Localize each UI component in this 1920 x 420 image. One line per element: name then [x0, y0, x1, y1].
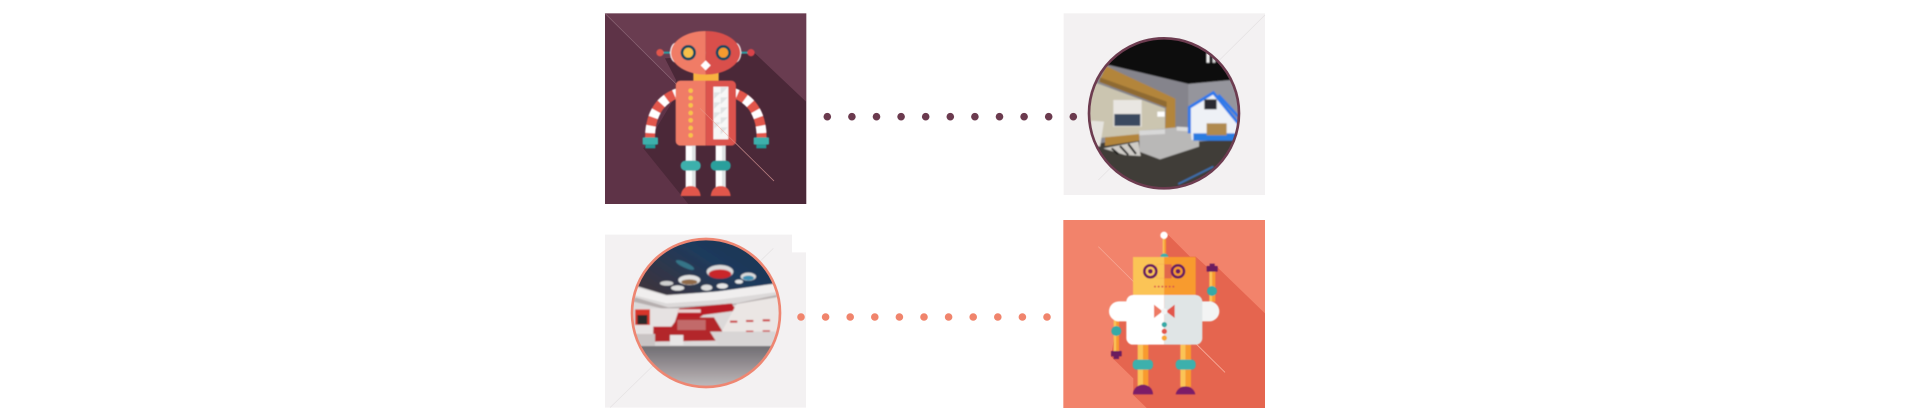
red wall graphics	[636, 308, 680, 334]
photo: lounge booth	[1090, 40, 1238, 187]
antenna	[1163, 238, 1164, 255]
robot: orange and white	[1109, 232, 1219, 394]
wood beam	[1099, 66, 1175, 132]
panel: coral robot tile	[1063, 220, 1265, 408]
photo: red exhibition hall	[633, 240, 778, 386]
left wall	[1090, 82, 1166, 138]
ceiling	[1108, 40, 1230, 85]
panel: exhibition hall photo, red hall	[605, 230, 806, 408]
shoulders	[1109, 301, 1139, 321]
floor	[641, 345, 771, 386]
neck	[693, 73, 719, 81]
panel: purple robot tile	[605, 13, 806, 204]
left lowered arm	[1114, 320, 1116, 352]
starry ceiling	[638, 240, 773, 296]
chest buttons	[688, 88, 693, 138]
legs	[1138, 345, 1143, 387]
body	[676, 81, 706, 146]
long shadow	[1111, 235, 1265, 408]
display counter and wall	[722, 297, 780, 332]
bow tie	[1154, 305, 1163, 318]
low cabinet	[1105, 134, 1139, 146]
legs	[686, 146, 696, 187]
blue house booth	[1188, 92, 1238, 140]
ceiling lights	[707, 265, 733, 278]
head	[671, 31, 706, 75]
long shadow	[643, 53, 806, 204]
chest panel	[713, 87, 728, 139]
head	[1133, 257, 1164, 295]
robot: red	[643, 31, 769, 196]
buttons	[1162, 322, 1167, 327]
striped rug	[1103, 142, 1141, 156]
back wall	[1112, 64, 1188, 82]
white soffit	[633, 283, 780, 303]
framed picture	[1113, 100, 1142, 127]
connector: coral dotted line	[797, 313, 1051, 321]
panel: exhibition hall photo, blue booth	[1064, 13, 1265, 200]
ears and antennae	[662, 52, 750, 54]
infographic canvas	[604, 13, 1265, 408]
sofa	[1139, 127, 1199, 159]
right raised arm	[1209, 272, 1212, 302]
arms	[643, 93, 677, 148]
floor	[1098, 140, 1232, 187]
body	[1126, 295, 1164, 345]
connector: purple dotted line	[824, 113, 1077, 120]
